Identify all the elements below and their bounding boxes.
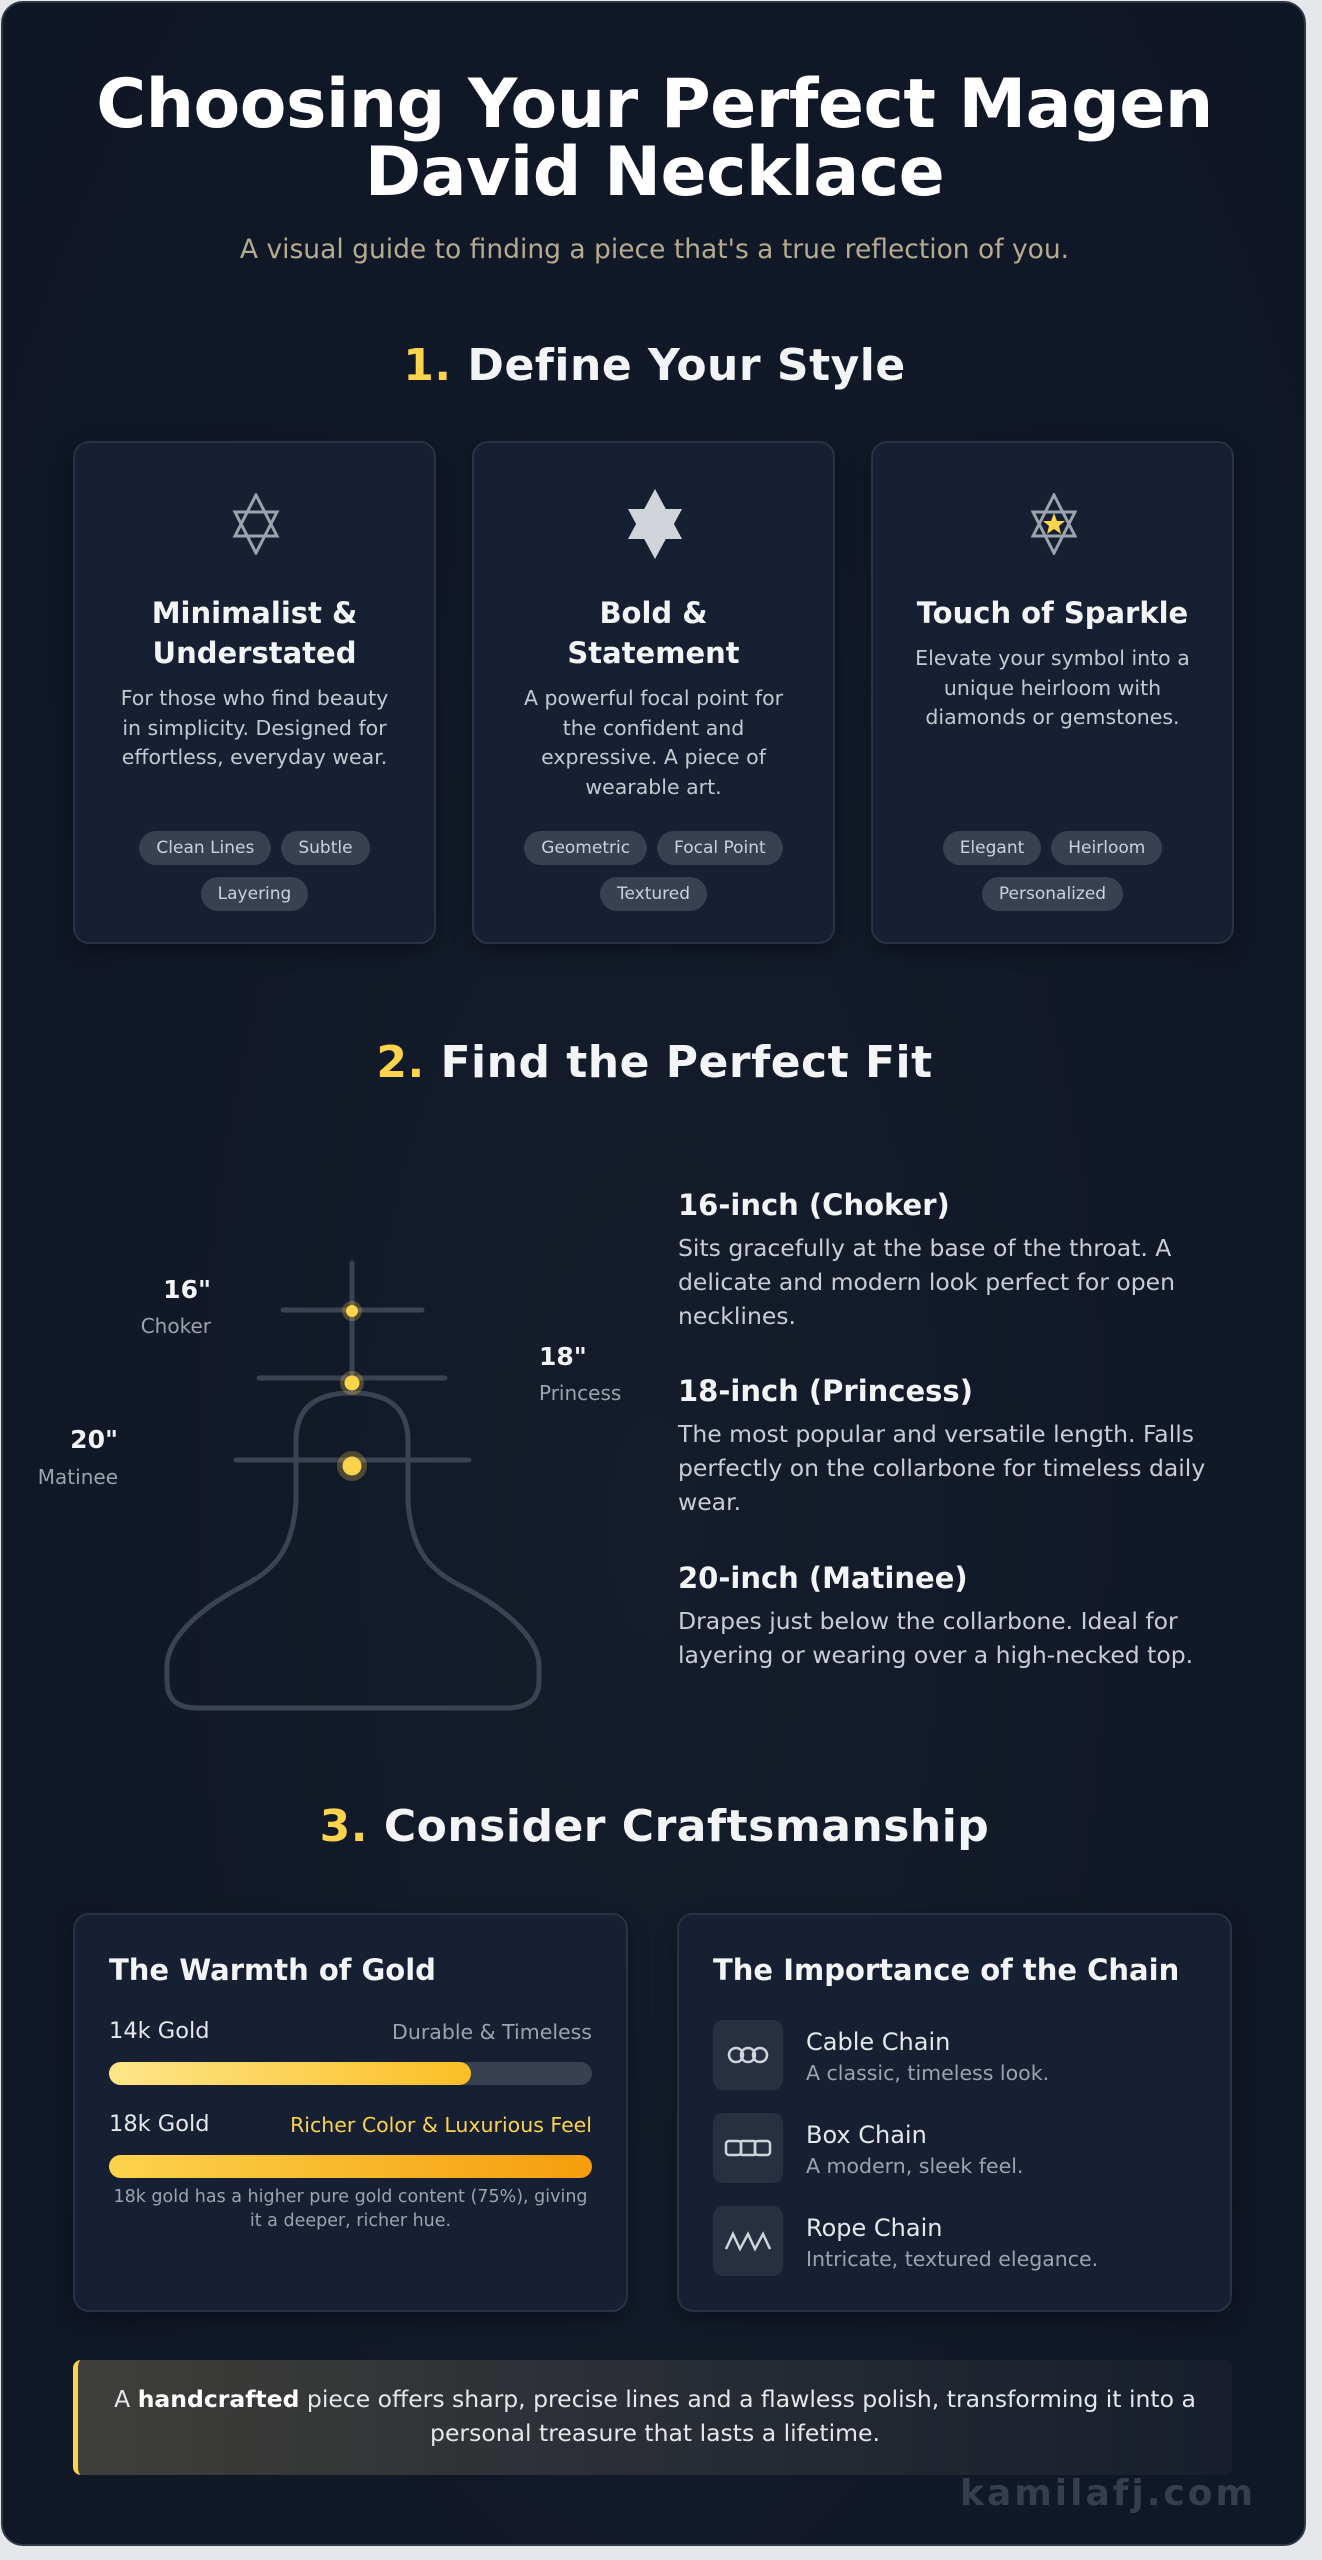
tags <box>943 831 1162 911</box>
text: 18 inch <box>678 1374 1205 1516</box>
text: Drapes just below the collarbone. Ideal for layering or wearing over a high-necked top. <box>678 1607 1193 1669</box>
tags: Geometric <box>541 838 630 858</box>
card heading: The Importance of the Chain <box>713 1953 1179 1987</box>
icon: star of david with gem <box>1030 493 1078 555</box>
item: cable chain <box>713 2020 1049 2090</box>
tags: Clean Lines <box>156 838 254 858</box>
tags: Personalized <box>999 884 1106 904</box>
panel: chain <box>677 1913 1232 2312</box>
callout <box>73 2360 1232 2475</box>
label: princess: Princess <box>539 1381 621 1405</box>
text: 16-inch (Choker) <box>678 1188 950 1222</box>
panel: gold <box>73 1913 628 2312</box>
tags: Focal Point <box>674 838 766 858</box>
card title: Statement <box>567 636 740 670</box>
label: choker: Choker <box>141 1314 211 1338</box>
card title: Touch of Sparkle <box>917 596 1188 630</box>
bar: 18k: Richer Color & Luxurious Feel <box>290 2113 592 2137</box>
card heading: The Warmth of Gold <box>109 1953 436 1987</box>
panel: bold <box>472 441 835 944</box>
text: 18-inch (Princess) <box>678 1374 973 1408</box>
card title: Minimalist & <box>152 596 357 630</box>
text: Sits gracefully at the base of the throat. A delicate and modern look perfect for open necklines. <box>678 1234 1175 1330</box>
watermark: kamilafj.com <box>960 2473 1256 2514</box>
bar: 14k: Durable & Timeless <box>392 2020 592 2044</box>
bar: 18k <box>109 2111 592 2178</box>
tags <box>524 831 783 911</box>
bar: 14k <box>109 2018 592 2085</box>
text: 16 inch <box>678 1188 1175 1330</box>
label: 18 inch: 18" <box>539 1342 587 1371</box>
tags: Subtle <box>298 838 353 858</box>
tags: Layering <box>218 884 291 904</box>
tags: Elegant <box>960 838 1024 858</box>
title: Choosing Your Perfect Magen <box>96 65 1213 144</box>
label: 16 inch: 16" <box>163 1275 211 1304</box>
tags: Textured <box>617 884 690 904</box>
item: rope chain <box>713 2206 1098 2276</box>
text: The most popular and versatile length. Falls perfectly on the collarbone for timeless daily wear. <box>678 1420 1205 1516</box>
callout: A handcrafted piece offers sharp, precise lines and a flawless polish, transforming it into a personal treasure that lasts a lifetime. <box>114 2385 1196 2447</box>
card description: For those who find beauty in simplicity. Designed for effortless, everyday wear. <box>121 686 388 769</box>
chart: necklace length diagram <box>164 1260 542 1710</box>
heading: section 2: 2. Find the Perfect Fit <box>376 1037 933 1088</box>
title <box>96 65 1213 212</box>
note: 18k gold has a higher pure gold content (75%), giving it a deeper, richer hue. <box>113 2187 588 2231</box>
card title: Bold & <box>599 596 708 630</box>
item: cable chain: A classic, timeless look. <box>806 2061 1049 2085</box>
label: matinee: Matinee <box>38 1465 118 1489</box>
item: rope chain: Rope Chain <box>806 2214 942 2242</box>
panel: sparkle <box>871 441 1234 944</box>
panel: minimalist <box>73 441 436 944</box>
title: David Necklace <box>365 133 944 212</box>
tags: Heirloom <box>1068 838 1145 858</box>
item: cable chain: Cable Chain <box>806 2028 950 2056</box>
subtitle: A visual guide to finding a piece that's a true reflection of you. <box>240 234 1069 265</box>
card title <box>567 596 740 670</box>
item: box chain <box>713 2113 1023 2183</box>
icon: filled star of david <box>628 489 682 559</box>
tags <box>139 831 370 911</box>
card title: Understated <box>153 636 356 670</box>
icon: outline star of david <box>232 493 280 555</box>
card title <box>152 596 357 670</box>
text: 20-inch (Matinee) <box>678 1561 968 1595</box>
heading: section 3: 3. Consider Craftsmanship <box>320 1801 989 1852</box>
card description: A powerful focal point for the confident and expressive. A piece of wearable art. <box>524 686 783 798</box>
item: rope chain: Intricate, textured elegance. <box>806 2247 1098 2271</box>
text: 20 inch <box>678 1561 1193 1669</box>
card description: Elevate your symbol into a unique heirloom with diamonds or gemstones. <box>915 646 1190 729</box>
item: box chain: Box Chain <box>806 2121 927 2149</box>
heading: section 1: 1. Define Your Style <box>403 340 906 391</box>
label: 20 inch: 20" <box>70 1425 118 1454</box>
item: box chain: A modern, sleek feel. <box>806 2154 1023 2178</box>
bar: 14k: 14k Gold <box>109 2018 210 2044</box>
bar: 18k: 18k Gold <box>109 2111 210 2137</box>
